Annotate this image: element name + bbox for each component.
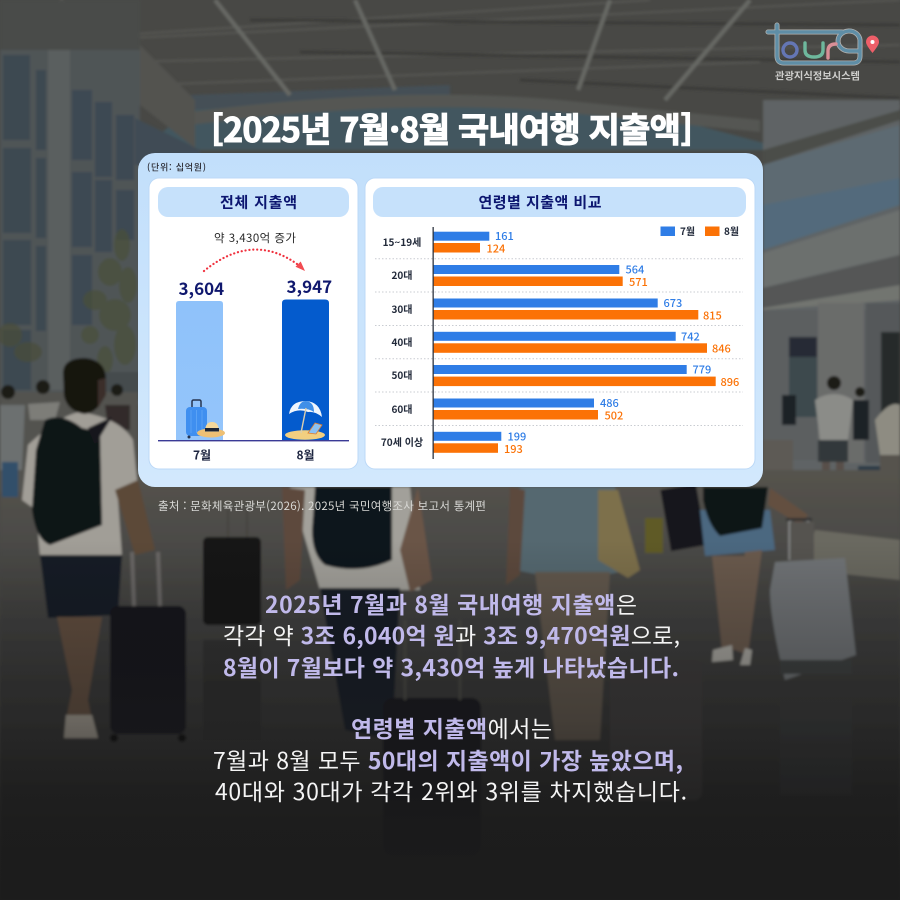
age labels: 15~19세 [383,234,421,249]
label: August: 8월 [296,446,315,464]
age labels: 30대 [392,301,412,316]
right side hall [763,100,900,500]
age labels: 50대 [392,367,412,382]
logo: tour9: 관광지식정보시스템 [775,68,860,82]
bar group: 30s: 815 [703,308,722,324]
bar group: 30s: 673 [664,295,682,311]
bar group: 20s: 564 [626,262,644,278]
text block: summary: 각각 약 3조 6,040억 원과 3조 9,470억원으로, [223,617,680,651]
age labels: 70세 이상 [381,434,423,449]
baseline [158,440,349,441]
silver suitcase [790,520,808,560]
value: July total: 3,604 [178,275,224,300]
trees [0,229,137,374]
bar group: 70+: 193 [504,441,523,457]
ceiling strokes [90,0,900,85]
panel: spending by age [365,178,755,469]
bar group: 20s: 571 [629,274,648,290]
bar group: 70+ [433,428,526,457]
bar group: 70+: 199 [508,428,526,444]
heading: by age: 연령별 지출액 비교 [478,192,602,212]
bar group: 30s [433,295,722,324]
label: July: 7월 [193,446,211,464]
bar: July [176,301,223,440]
person 2 [290,487,420,590]
bar group: 60s: 486 [600,395,619,411]
heading: total spending: 전체 지출액 [220,192,297,212]
bar group: 40s: 742 [681,328,700,344]
age labels: 40대 [392,334,412,349]
suitcase 2 [203,537,261,625]
bar group: 50s: 896 [720,374,739,390]
far crowd right [827,376,841,390]
age labels [381,234,423,449]
axis [432,227,434,459]
bar group: 40s: 846 [712,340,731,356]
sky glimpses under roof [190,85,450,112]
legend: 7월 [680,223,695,238]
source note: 출처 : 문화체육관광부(2026). 2025년 국민여행조사 보고서 통계편 [158,498,486,514]
legend [660,223,739,238]
suitcase 3 [383,698,481,856]
person 1 [22,412,138,556]
text block: age analysis: 40대와 30대가 각각 2위와 3위를 차지했습니다. [215,773,687,807]
left windows [0,45,140,405]
bar: August [282,300,329,440]
bar group: 40s [433,328,731,356]
panel: total spending [149,178,358,469]
person 3 [515,487,630,575]
text block: summary: 2025년 7월과 8월 국내여행 지출액은 [265,586,637,620]
icon: suitcase and hat [186,400,225,438]
icon: parasol and sand [285,401,325,440]
bar group: 15~19: 124 [486,240,505,256]
bar group: 50s [433,362,739,390]
arrow: dotted red curve [204,250,305,271]
person 4 [700,510,775,556]
text block: age analysis: 연령별 지출액에서는 [351,710,552,744]
increase label: 약 3,430억 증가 [214,230,296,246]
far people left [1,385,15,399]
unit note: (단위: 십억원) [147,160,206,174]
panel: chart card [138,153,763,487]
text block: age analysis [213,710,687,807]
value: August total: 3,947 [286,273,332,298]
floor [0,470,900,900]
bar group: 60s [433,395,623,424]
text block: age analysis: 7월과 8월 모두 50대의 지출액이 가장 높았으며, [213,742,683,776]
bar group: 20s [433,262,648,290]
suitcase 1 [110,606,186,734]
bar group: 15~19: 161 [495,228,514,244]
bar group: 50s: 779 [692,362,711,378]
mid-bg suitcase [660,484,707,551]
age labels: 20대 [392,267,412,282]
age labels: 60대 [392,401,412,416]
text block: summary: 8월이 7월보다 약 3,430억 높게 나타났습니다. [223,649,679,683]
text block: summary [223,586,680,683]
bar group: 60s: 502 [604,408,623,424]
bar group: 15~19 [433,228,514,256]
logo: tour9 [768,25,879,82]
legend: 8월 [724,223,739,238]
title: [2025년 7월·8월 국내여행 지출액] [211,103,693,152]
